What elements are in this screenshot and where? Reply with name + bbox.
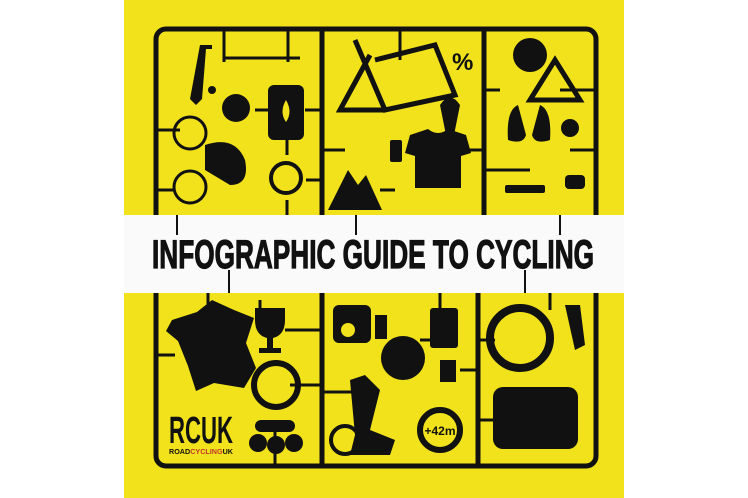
icon: speedometer bbox=[254, 363, 298, 407]
icon: percent: % bbox=[452, 49, 473, 76]
icon: mountain bbox=[328, 170, 382, 210]
icon: pump bbox=[190, 45, 212, 105]
icon: stopwatch +42m bbox=[420, 410, 460, 450]
icon: trophy bbox=[255, 308, 285, 353]
icon: gels bbox=[390, 140, 402, 162]
icon: shoe bbox=[565, 305, 585, 350]
panel: bottom icons bbox=[166, 300, 585, 456]
icon: triangle bbox=[530, 60, 580, 100]
icon: jersey bbox=[405, 129, 471, 188]
icon: bike frame bbox=[340, 40, 455, 110]
logo: RCUK: ROADCYCLINGUK bbox=[169, 449, 233, 456]
icon: derailleur bbox=[561, 119, 579, 137]
sprue connectors across band bbox=[177, 215, 560, 293]
icon: lungs bbox=[508, 105, 550, 142]
icon: pills bbox=[249, 420, 303, 454]
logo: RCUK: RCUK bbox=[169, 410, 233, 452]
icon: chainring bbox=[381, 336, 425, 380]
icon: syringe bbox=[505, 185, 545, 193]
icon: blood bag bbox=[268, 85, 304, 140]
icon: camera bbox=[333, 305, 387, 343]
icon: cyclist bbox=[174, 117, 246, 203]
icon: beer mug bbox=[430, 308, 458, 348]
icon: cassette bbox=[513, 38, 547, 72]
white title band bbox=[124, 215, 624, 293]
logo: RCUK bbox=[169, 410, 233, 456]
icon: stopwatch bbox=[271, 163, 301, 193]
icon: france map bbox=[166, 300, 256, 391]
icon: wheel bbox=[490, 308, 550, 368]
icon: bomb bbox=[208, 86, 250, 122]
yellow cover background bbox=[124, 0, 624, 498]
icon: stopwatch +42m: +42m bbox=[424, 424, 456, 438]
icon: turbo cyclist bbox=[350, 375, 395, 455]
panel: top icons bbox=[174, 38, 585, 210]
icon: levers bbox=[440, 98, 460, 135]
sprue frame bbox=[156, 29, 596, 466]
icon: shoe cleat bbox=[565, 175, 585, 189]
icon: chip bbox=[440, 360, 456, 382]
icon: team bus bbox=[493, 387, 578, 449]
